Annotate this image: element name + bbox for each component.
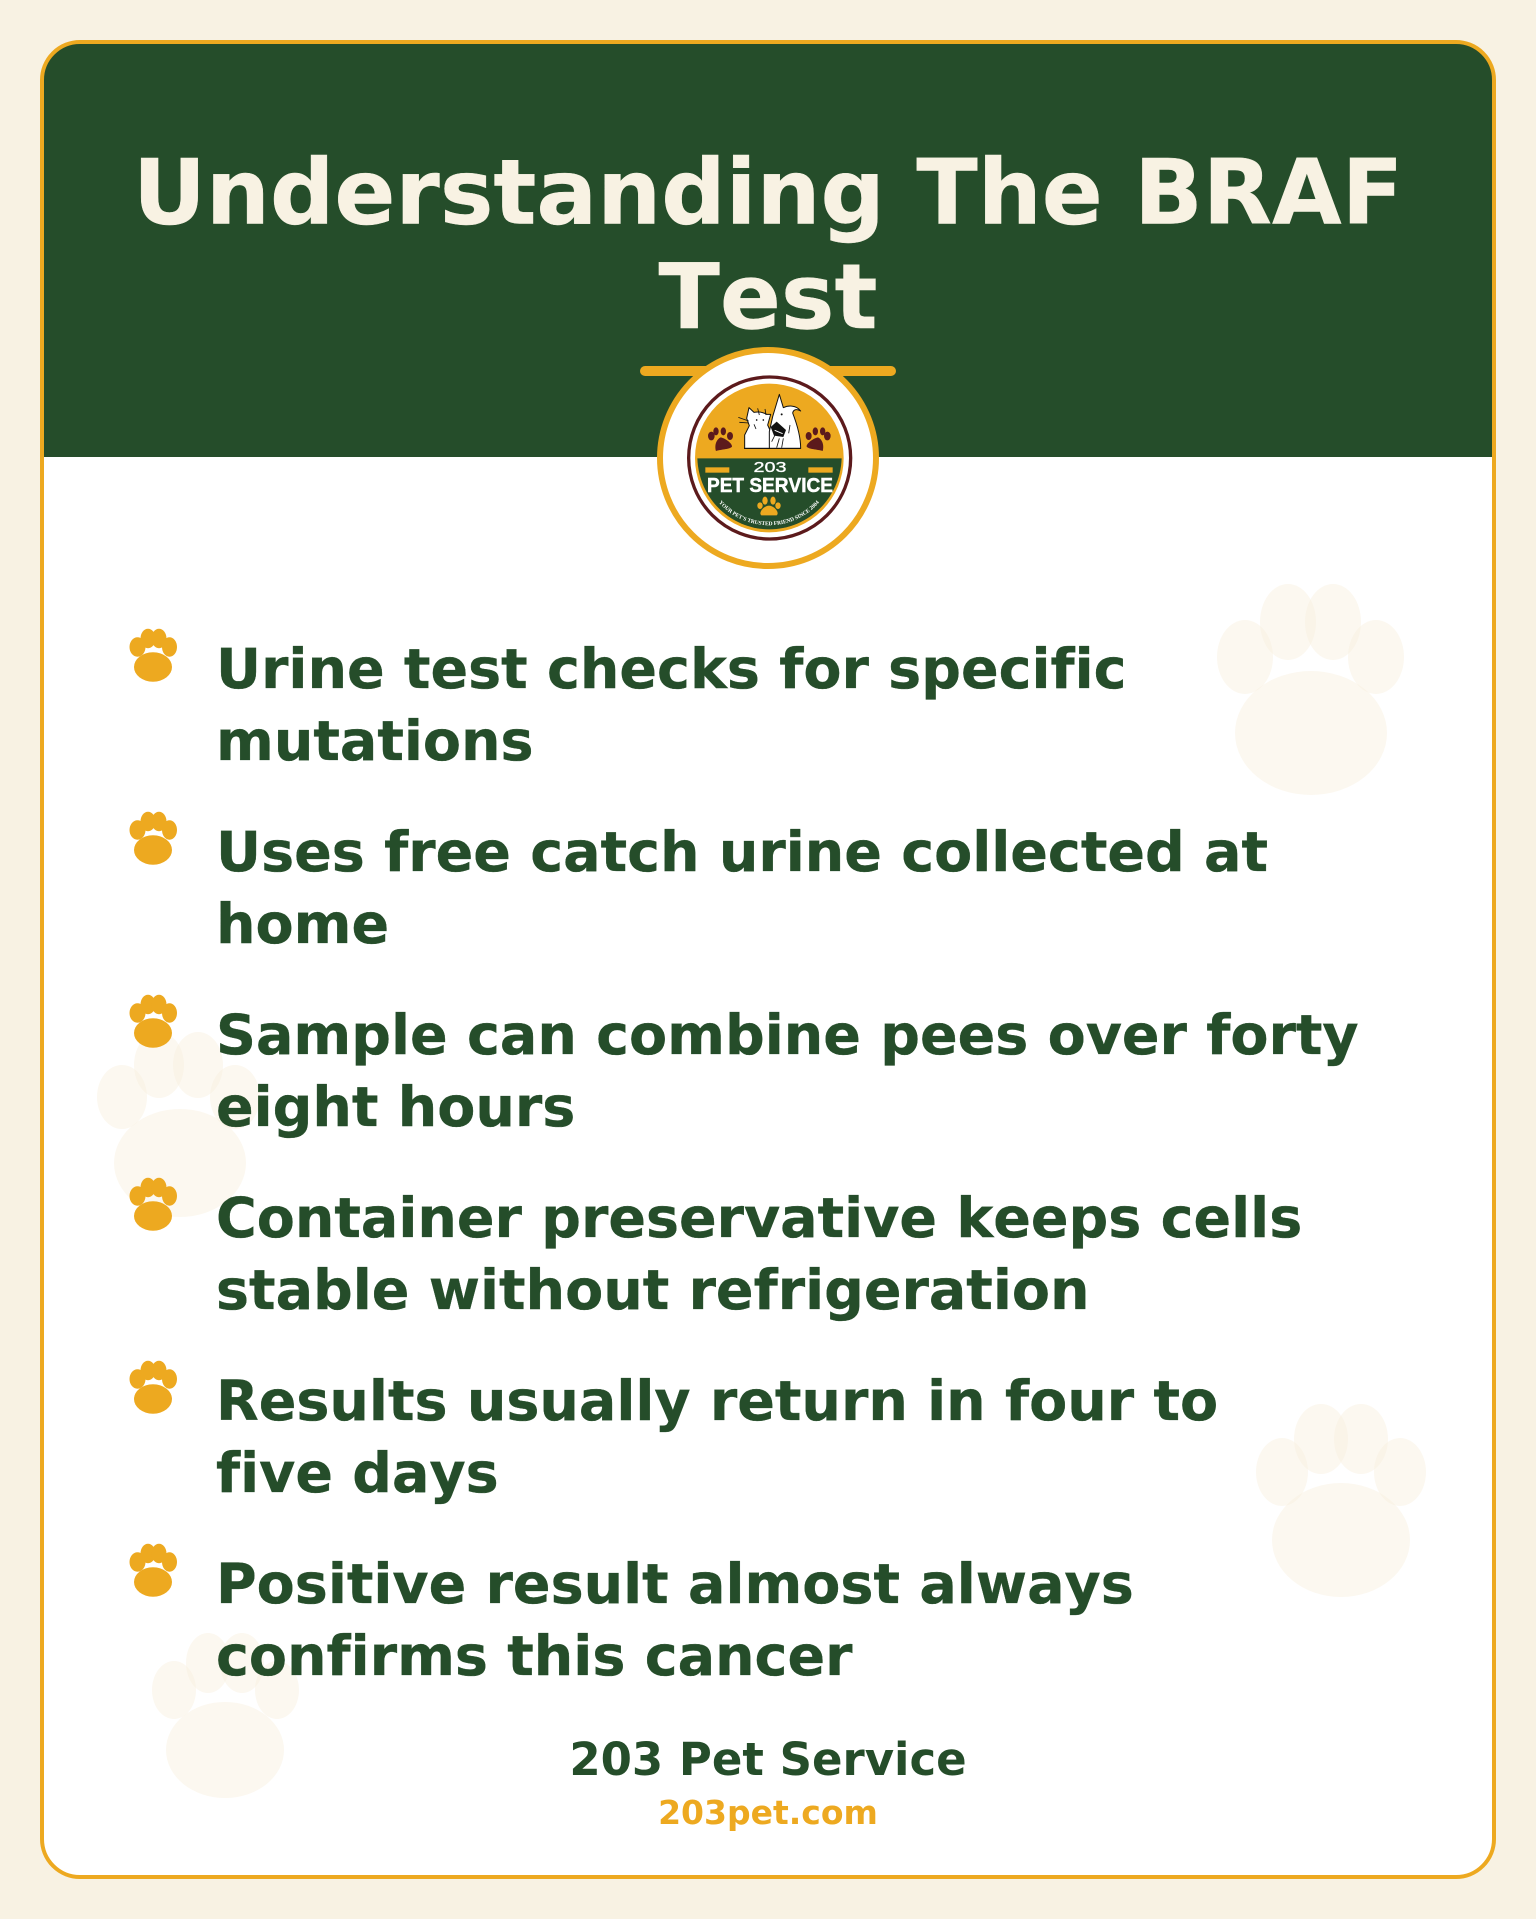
icon: cat and dog (738, 394, 801, 448)
title underline (640, 366, 896, 376)
icon: paw bullet (130, 812, 177, 865)
watermark paw: middle left (97, 1032, 260, 1217)
list item 6 (130, 1544, 1134, 1689)
header band (42, 42, 1494, 457)
list item 2 (130, 812, 1268, 957)
footer website: 203pet.com (658, 1793, 878, 1832)
watermark paw: bottom left (152, 1633, 299, 1798)
list item 5: five days (216, 1441, 499, 1506)
list item 3: eight hours (216, 1075, 575, 1140)
icon: paw bullet (130, 1361, 177, 1414)
list item 4 (130, 1178, 1302, 1323)
list item 1: Urine test checks for specific (216, 637, 1127, 702)
icon: paw bullet (130, 995, 177, 1048)
icon: paw bullet (130, 629, 177, 682)
title: Test (658, 245, 878, 350)
logo badge (657, 347, 879, 569)
list item 1: mutations (216, 709, 534, 774)
icon: paw bullet (130, 1178, 177, 1231)
list item 3: Sample can combine pees over forty (216, 1003, 1359, 1068)
title: Understanding The BRAF (133, 140, 1403, 246)
list item 2: home (216, 892, 389, 957)
list item 5 (130, 1361, 1218, 1506)
logo badge: PET SERVICE (707, 475, 833, 497)
list item 2: Uses free catch urine collected at (216, 820, 1268, 885)
watermark paw: lower right (1256, 1404, 1426, 1597)
list item 6: confirms this cancer (216, 1624, 853, 1689)
list item 4: stable without refrigeration (216, 1258, 1090, 1323)
list item 1 (130, 629, 1127, 774)
icon: paw bullet (130, 1544, 177, 1597)
footer brand name: 203 Pet Service (569, 1733, 967, 1786)
list item 5: Results usually return in four to (216, 1369, 1218, 1434)
list item 4: Container preservative keeps cells (216, 1186, 1302, 1251)
logo badge: 203 (754, 459, 786, 476)
list item 3 (130, 995, 1359, 1140)
title (133, 140, 1403, 350)
watermark paw: top right (1217, 584, 1404, 795)
logo badge: YOUR PET'S TRUSTED FRIEND SINCE 2004 (720, 500, 819, 526)
list item 6: Positive result almost always (216, 1552, 1134, 1617)
